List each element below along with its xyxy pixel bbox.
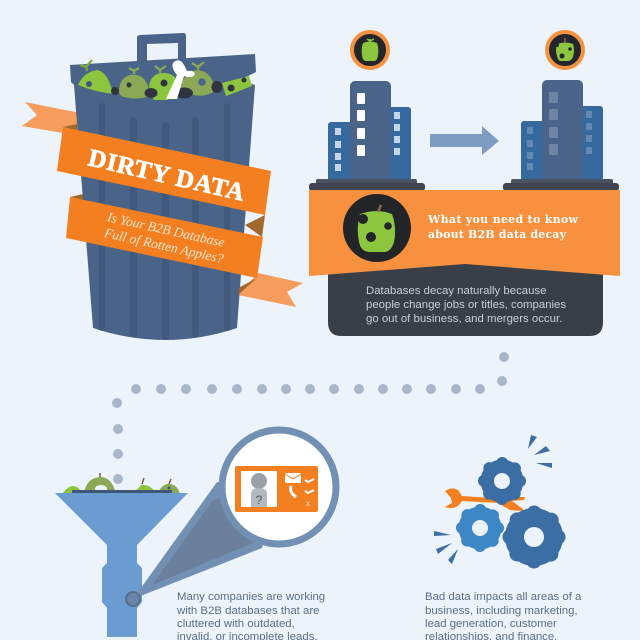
text block: bad data: business, including marketing, [425, 605, 578, 617]
icon: rotten apple badge [547, 32, 583, 68]
text block: explanation: people change jobs or titles, companies [366, 299, 566, 311]
can ridges [99, 103, 230, 340]
dark rubbish in can [111, 81, 222, 98]
buildings: healthy [309, 81, 425, 191]
contact card [235, 466, 318, 512]
rotten apples in can [78, 60, 252, 100]
contact card: ? [256, 493, 263, 507]
subtitle line 1: Is Your B2B Database [105, 209, 226, 250]
text block: explanation: Databases decay naturally because [366, 285, 546, 297]
banner: dirty data [57, 127, 271, 215]
panel: orange header band [309, 190, 620, 276]
heading: What you need to know [427, 213, 579, 226]
can lid and body [70, 54, 256, 340]
gear large [505, 508, 563, 566]
icon: magnifier with contact card [126, 430, 336, 606]
title: DIRTY DATA [86, 145, 248, 207]
text block: bad data: Bad data impacts all areas of a [425, 591, 582, 603]
spark rays [434, 435, 552, 564]
back ribbon right [238, 273, 303, 307]
icon: funnel with apples [55, 473, 188, 637]
icon: gears and wrench [434, 435, 563, 566]
arrow [430, 126, 499, 155]
icon: rotten apple [343, 194, 411, 262]
buildings: decayed [503, 80, 619, 191]
can handle [137, 33, 186, 62]
text block: cluttered databases: Many companies are working [177, 591, 325, 603]
banner: subtitle [66, 197, 263, 278]
icon: healthy apple badge [352, 32, 388, 68]
apples on funnel [62, 473, 180, 495]
icon: bone [166, 60, 195, 99]
subtitle line 2: Full of Rotten Apples? [102, 225, 225, 266]
gear top [480, 460, 524, 502]
text block: cluttered databases: with B2B databases that are [176, 605, 319, 617]
panel: decay explanation [328, 262, 603, 336]
gear light [458, 506, 502, 550]
heading: about B2B data decay [428, 228, 567, 241]
contact card: x [306, 499, 310, 508]
dotted connector [112, 352, 509, 484]
icon: trash can with banners [22, 33, 303, 340]
text block: bad data: lead generation, customer [425, 618, 557, 630]
back ribbon left [22, 102, 80, 136]
text block: cluttered databases: cluttered with outdated, [177, 618, 295, 630]
text block: explanation: go out of business, and mergers occur. [366, 313, 562, 325]
front banner folds [63, 124, 265, 295]
wrench [445, 488, 525, 511]
